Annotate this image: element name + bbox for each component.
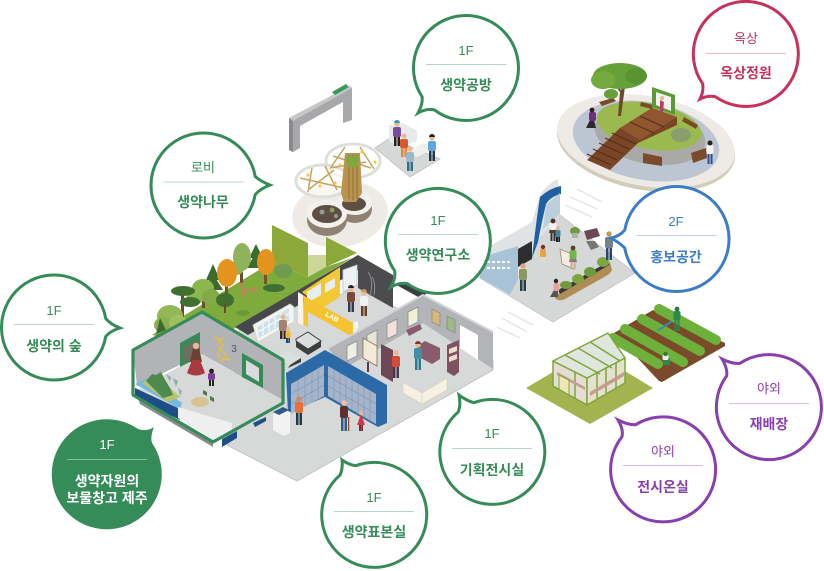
callout: 1F 생약연구소 — [385, 188, 490, 293]
tree — [591, 63, 647, 116]
callout: 1F 생약의 숲: 생약의 숲 — [26, 338, 82, 354]
step stripes lower — [497, 312, 533, 338]
kiosk — [273, 407, 290, 436]
green photo frame — [652, 87, 675, 115]
curved wall — [478, 179, 561, 296]
framed botanical artworks — [347, 307, 455, 361]
forest trees and deer — [154, 243, 292, 334]
garden platform — [549, 83, 743, 205]
callout: 1F 생약공방 — [413, 15, 518, 120]
callout: 야외 재배장: 야외 — [757, 381, 781, 396]
callout: 야외 전시온실: 전시온실 — [637, 479, 689, 495]
lobby arch gate — [289, 84, 352, 152]
callout: 1F 생약의 숲 — [1, 275, 120, 380]
callout: 1F 기획전시실: 기획전시실 — [460, 462, 524, 478]
room number: 3 — [231, 344, 237, 355]
callout: 로비 생약나무 — [151, 133, 270, 238]
callout: 1F 기획전시실: 1F — [484, 426, 500, 441]
flower bush — [671, 128, 691, 142]
right exhibition hall walls — [328, 295, 493, 369]
callout: 2F 홍보공간: 홍보공간 — [650, 249, 702, 265]
callout: 로비 생약나무: 로비 — [191, 160, 215, 175]
isometric illustration: main building 1F — [133, 84, 493, 481]
wooden deck and stairs — [587, 108, 677, 170]
callout: 옥상 옥상정원: 옥상정원 — [720, 65, 772, 81]
jeju treasure room with green outline — [133, 312, 283, 447]
callout: 1F 기획전시실 — [440, 395, 545, 504]
callout: 1F 생약표본실 — [322, 460, 427, 567]
exhibition stands and furniture — [363, 324, 459, 404]
hall visitors — [519, 219, 613, 297]
green door frames — [180, 332, 200, 367]
specimen room visitors — [295, 396, 365, 431]
room back walls — [133, 312, 202, 386]
callout: 야외 재배장: 재배장 — [750, 416, 788, 432]
workshop floor and people — [375, 120, 440, 177]
callout: 1F 생약자원의 보물창고 제주 — [52, 419, 162, 529]
lab gate with LAB sign: LAB — [324, 311, 340, 324]
garden platform top — [550, 81, 742, 201]
callout: 로비 생약나무: 생약나무 — [177, 194, 229, 210]
isometric illustration: rooftop garden — [549, 63, 743, 205]
callout: 야외 전시온실: 야외 — [651, 444, 675, 459]
main floor plate — [227, 285, 493, 481]
callout: 1F 생약자원의 보물창고 제주: 보물창고 제주 — [66, 490, 148, 506]
lab: yellow panel wall and framed board — [302, 265, 357, 308]
callout: 1F 생약공방: 1F — [458, 43, 474, 58]
lab visitors — [279, 285, 368, 343]
green hexagon outline — [133, 312, 283, 442]
callout: 1F 생약공방: 생약공방 — [440, 77, 492, 93]
lobby medicinal herb tree — [288, 144, 392, 253]
walkway ring — [566, 90, 726, 192]
greenhouse — [553, 333, 625, 405]
lab gate with LAB sign — [298, 292, 358, 337]
lab display wall and tables — [253, 304, 321, 368]
crop rows — [613, 309, 716, 364]
stone wall ring — [590, 97, 710, 173]
callout: 야외 재배장 — [716, 355, 821, 460]
forest ground — [152, 258, 352, 345]
room floor — [137, 354, 281, 440]
white display platform — [178, 407, 232, 440]
callout: 1F 생약자원의 보물창고 제주: 생약자원의 — [75, 473, 139, 489]
callout: 1F 생약연구소: 생약연구소 — [406, 247, 470, 263]
olive ground — [526, 350, 653, 424]
woman in red skirt — [187, 343, 205, 376]
crop field base — [614, 310, 725, 382]
planter — [555, 257, 612, 300]
callout: 1F 생약자원의 보물창고 제주: 1F — [99, 437, 115, 452]
callout: 2F 홍보공간: 2F — [668, 214, 684, 229]
poster, sign and pot — [560, 227, 600, 269]
isometric illustration: 2F promotion hall — [478, 179, 635, 338]
benches — [599, 98, 707, 166]
step stripes upper — [565, 189, 602, 217]
callout: 2F 홍보공간 — [611, 187, 729, 292]
dark back wall — [235, 255, 432, 335]
isometric illustration: outdoor greenhouse and field — [526, 307, 725, 424]
callout: 옥상 옥상정원 — [693, 1, 798, 106]
callout: 1F 생약표본실: 1F — [366, 490, 382, 505]
garden visitors — [586, 108, 714, 164]
callout: 1F 생약의 숲: 1F — [46, 303, 62, 318]
farmers — [657, 307, 680, 365]
navy base blocks — [222, 417, 266, 447]
room base shadow — [138, 398, 213, 447]
exhibition hall visitors — [392, 341, 422, 378]
hall floor — [478, 215, 635, 322]
callout: 1F 생약연구소: 1F — [430, 213, 446, 228]
callout: 옥상 옥상정원: 옥상 — [734, 31, 758, 46]
child in purple — [208, 369, 215, 386]
DNA symbol — [214, 337, 230, 361]
callout: 야외 전시온실 — [611, 417, 716, 522]
diorama blue base and mountains — [135, 388, 180, 420]
olive garden walls — [272, 225, 357, 277]
lawn — [593, 94, 705, 158]
blue specimen cabinets — [286, 350, 387, 427]
callout: 1F 생약표본실: 생약표본실 — [342, 524, 406, 540]
